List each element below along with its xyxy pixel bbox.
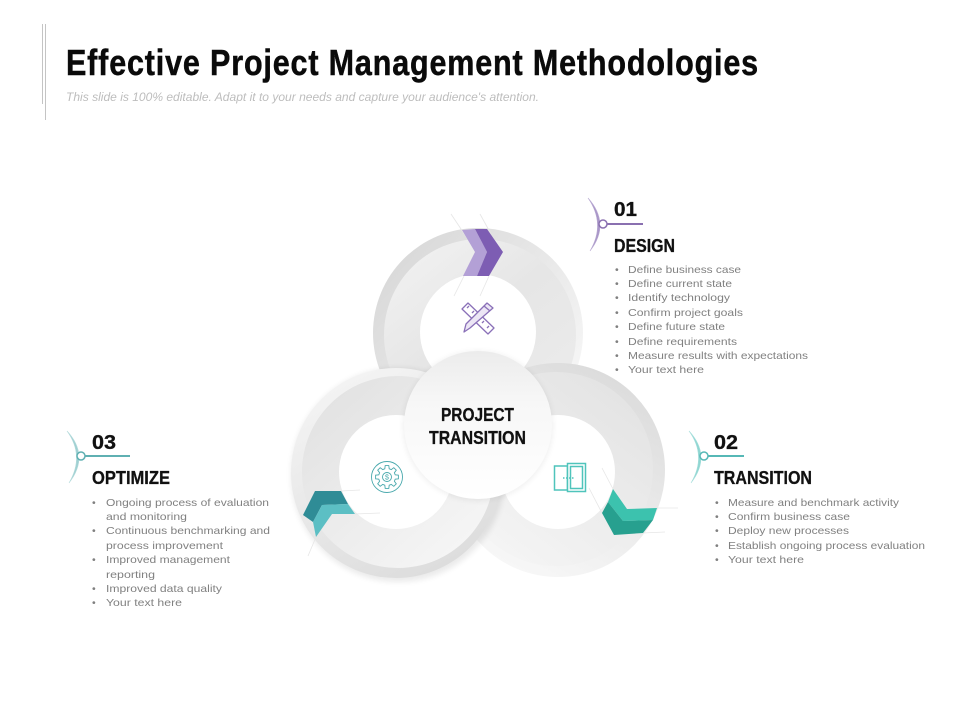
center label: TRANSITION [429, 428, 526, 448]
list: optimize [92, 497, 270, 609]
panel: 03 optimize [67, 431, 270, 609]
ring: transition (right) [451, 363, 678, 577]
marker: 01 [588, 198, 643, 251]
list: transition: • [715, 497, 719, 509]
number 03: 03 [92, 432, 116, 454]
chevron: purple [451, 214, 503, 296]
icon: gear with dollar: $ [385, 474, 389, 482]
list: optimize: process improvement [106, 540, 223, 552]
ring: design (top) [373, 214, 583, 438]
list: optimize: • [92, 597, 96, 609]
list: design: Define future state [628, 321, 725, 333]
heading: optimize: OPTIMIZE [92, 468, 170, 488]
list: design: Measure results with expectations [628, 350, 808, 362]
list: optimize: • [92, 497, 96, 509]
list: design: Your text here [628, 364, 704, 376]
list: transition: Measure and benchmark activity [728, 497, 900, 509]
subtitle: This slide is 100% editable. Adapt it to your needs and capture your audience's attention. [66, 92, 539, 104]
number 02: 02 [714, 432, 738, 454]
title: Effective Project Management Methodologies [66, 42, 759, 83]
list: optimize: reporting [106, 569, 155, 581]
list: transition: Establish ongoing process evaluation [728, 540, 925, 552]
number 01: 01 [614, 199, 637, 221]
list: design: • [615, 264, 619, 276]
list: design: • [615, 292, 619, 304]
list: optimize: Improved data quality [106, 583, 223, 595]
icon: gear with dollar [372, 462, 402, 492]
marker: 03 [67, 431, 130, 483]
list: design: • [615, 307, 619, 319]
list: design: • [615, 278, 619, 290]
list: design: Define business case [628, 264, 741, 276]
list: transition: • [715, 540, 719, 552]
icon: ruler and pencil [462, 303, 494, 334]
list: transition: • [715, 525, 719, 537]
list: design: • [615, 336, 619, 348]
list: design: • [615, 321, 619, 333]
diagram: three rings [291, 214, 678, 582]
center label [429, 405, 526, 448]
list: optimize: Continuous benchmarking and [106, 525, 270, 537]
heading: design: DESIGN [614, 236, 675, 256]
panel: 01 design [588, 198, 808, 376]
list: optimize: and monitoring [106, 511, 187, 523]
header rule [42, 24, 46, 120]
list: design: • [615, 364, 619, 376]
list: design: • [615, 350, 619, 362]
chevron: teal right [589, 468, 678, 535]
list: design: Confirm project goals [628, 307, 743, 319]
list: transition: Your text here [728, 554, 804, 566]
list: optimize: • [92, 554, 96, 566]
list: optimize: Ongoing process of evaluation [106, 497, 269, 509]
center circle [403, 351, 553, 501]
heading: transition: TRANSITION [714, 468, 812, 488]
center label: PROJECT [441, 405, 514, 425]
marker: 02 [689, 431, 744, 483]
ring: optimize (left) [291, 368, 505, 582]
list: design: Identify technology [628, 292, 731, 304]
icon: doors [554, 464, 586, 492]
list: design: Define requirements [628, 336, 737, 348]
list: transition: • [715, 511, 719, 523]
list: optimize: Your text here [106, 597, 182, 609]
list: transition [715, 497, 925, 566]
panel: 02 transition [689, 431, 925, 566]
list: optimize: • [92, 583, 96, 595]
list: optimize: • [92, 525, 96, 537]
list: optimize: Improved management [106, 554, 230, 566]
chevron: teal left [303, 490, 380, 556]
list: transition: • [715, 554, 719, 566]
list: design [615, 264, 808, 376]
list: transition: Deploy new processes [728, 525, 849, 537]
list: design: Define current state [628, 278, 732, 290]
list: transition: Confirm business case [728, 511, 850, 523]
